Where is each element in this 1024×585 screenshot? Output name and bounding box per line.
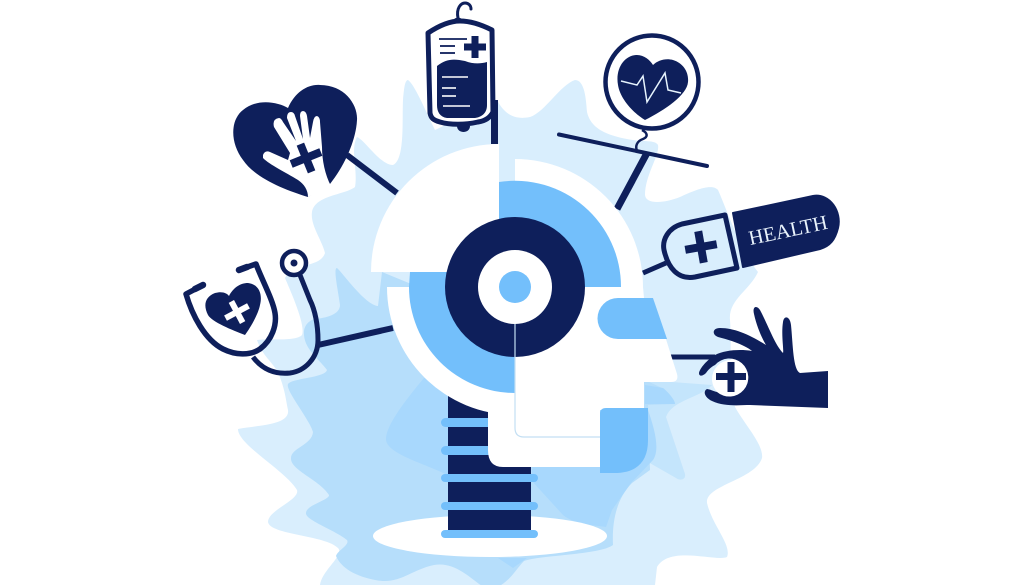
head: concentric target <box>445 217 585 357</box>
background blobs <box>238 80 762 585</box>
head: blue lower arc <box>409 272 515 393</box>
icon: heart with hand <box>233 85 357 197</box>
icon: stethoscope <box>186 251 318 373</box>
icon: pill capsule <box>664 196 839 277</box>
head: white face <box>488 159 677 467</box>
connector lines <box>318 100 715 357</box>
pill label: HEALTH <box>747 212 830 250</box>
head: blue upper arc <box>499 181 621 287</box>
head <box>371 144 677 473</box>
head: thin circuit line <box>515 324 600 437</box>
head: white back of skull <box>387 287 515 415</box>
icon: IV bag <box>428 3 493 132</box>
icon: hand holding pill <box>699 307 828 408</box>
neck column <box>441 395 538 538</box>
head: blue jaw <box>600 408 648 473</box>
head: white top-left quarter <box>371 144 499 272</box>
head: blue nose <box>597 298 667 339</box>
base ellipse <box>373 515 607 557</box>
icon: heart monitor balloon <box>559 36 707 166</box>
